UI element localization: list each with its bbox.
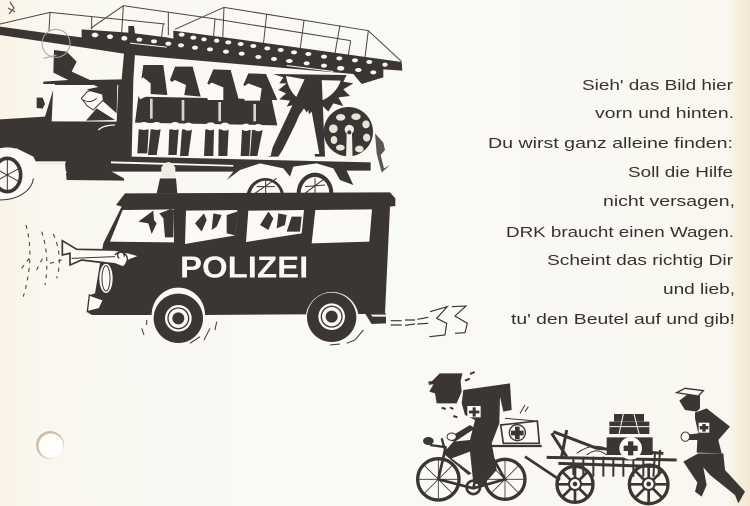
rear wheels: [238, 171, 338, 193]
tow bar: [525, 457, 560, 480]
windows: [110, 209, 372, 244]
knees: [138, 122, 263, 131]
poem: DRK braucht einen Wagen.: [506, 225, 734, 241]
poem: [488, 78, 735, 328]
tiny figure behind the reel: [375, 133, 390, 173]
poem: Du wirst ganz alleine finden:: [488, 136, 733, 152]
tunic buttons: [150, 99, 256, 121]
horn and hand: [62, 241, 140, 267]
turntable gear: [273, 74, 353, 112]
rear wheel: [306, 292, 363, 345]
poem: tu' den Beutel auf und gib!: [511, 312, 735, 328]
boots: [137, 129, 263, 156]
turntable legs: [268, 77, 325, 157]
poem: Soll die Hilfe: [628, 165, 733, 181]
cart cargo: [607, 414, 653, 460]
cart: [547, 430, 677, 504]
poem: Scheint das richtig Dir: [547, 253, 733, 269]
illustration: fire engine with turntable ladder: [0, 6, 402, 200]
van body: [87, 192, 395, 315]
passengers: [138, 209, 302, 237]
poem: nicht versagen,: [603, 194, 735, 210]
ladder: [0, 26, 402, 84]
faces: [134, 77, 262, 101]
front wheel: [142, 288, 217, 343]
cab and chassis: [0, 50, 371, 185]
roof siren: [157, 162, 177, 193]
punched binder hole: [36, 431, 64, 459]
bicycle lamp: [423, 437, 434, 445]
cyclist: [428, 372, 512, 485]
pale stamp ring: [42, 29, 70, 58]
cart hubs: [569, 478, 655, 490]
corner pencil mark: [8, 2, 15, 14]
ladder rungs: [92, 33, 388, 74]
front wheel: [0, 147, 33, 200]
firefighters: [133, 65, 277, 156]
hose reel: [324, 107, 373, 162]
cab window with driver: [52, 84, 118, 130]
first aid box on bicycle: [490, 405, 542, 446]
poem: Sieh' das Bild hier: [582, 78, 733, 94]
exhaust pipe and puffs: [365, 306, 467, 337]
bumper: [87, 295, 103, 312]
poem: vorn und hinten.: [595, 106, 734, 122]
wing mirror: [37, 98, 45, 109]
chassis cut-outs: [35, 161, 233, 173]
ladder rigging: [0, 6, 402, 62]
illustration: cyclist towing a Red Cross cart with runner: [418, 372, 745, 504]
headlight: [99, 264, 113, 293]
illustration: police van: [22, 162, 467, 345]
running helper: [677, 388, 745, 503]
sound waves: [22, 225, 62, 297]
police lettering: POLIZEI: [180, 249, 308, 284]
bicycle: [418, 438, 525, 500]
poem: und lieb,: [663, 282, 735, 298]
helmets: [141, 65, 277, 100]
